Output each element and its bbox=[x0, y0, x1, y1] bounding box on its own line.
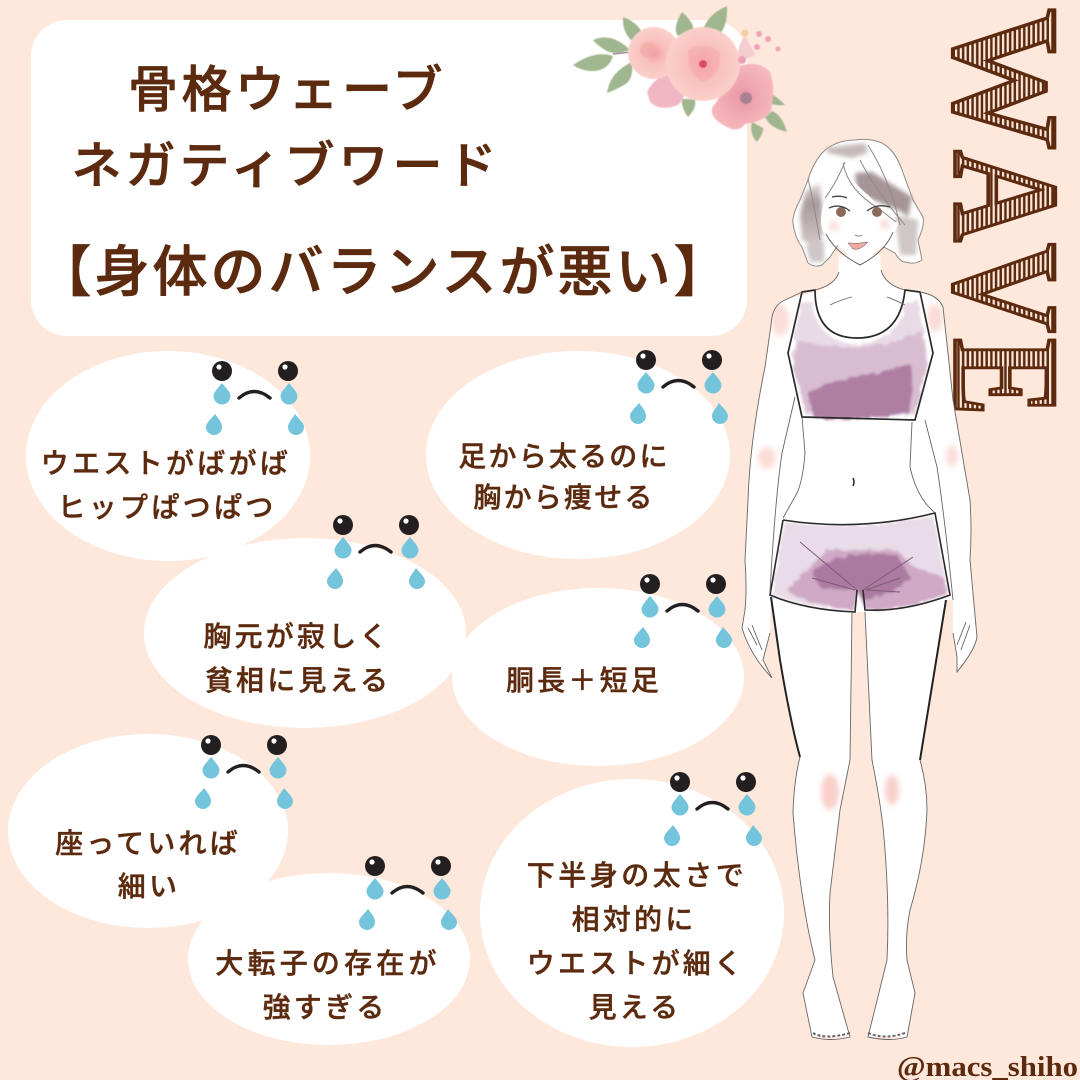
label line 2: 相対的に bbox=[572, 904, 696, 935]
body silhouette bbox=[742, 255, 977, 1037]
face bbox=[821, 163, 898, 265]
title line 2: ネガティブワード bbox=[72, 138, 500, 194]
shorts wash bbox=[772, 516, 948, 610]
illustration: rose bouquet bbox=[573, 6, 787, 142]
nose bbox=[855, 235, 862, 236]
mouth bbox=[848, 242, 868, 249]
body contour lines bbox=[742, 270, 977, 1040]
title line 1: 骨格ウェーブ bbox=[128, 62, 446, 118]
illustration: woman figure bbox=[742, 139, 977, 1039]
jaw bbox=[826, 232, 893, 265]
eyelids bbox=[829, 196, 890, 211]
crying face bbox=[195, 735, 293, 809]
oval: legs first bbox=[426, 350, 730, 559]
oval: lower body bbox=[480, 772, 784, 1047]
label: 大転子の存在が bbox=[215, 948, 441, 979]
hair shape bbox=[793, 139, 923, 266]
hair wash bbox=[800, 143, 918, 262]
label: 下半身の太さで bbox=[527, 860, 747, 891]
label line 2: 胸から痩せる bbox=[473, 482, 655, 513]
crying face bbox=[630, 350, 728, 424]
oval: chest bbox=[144, 515, 466, 728]
toes bbox=[813, 1033, 905, 1036]
crying face bbox=[634, 574, 732, 648]
leaves bbox=[573, 6, 787, 142]
label: 足から太るのに bbox=[458, 441, 670, 472]
label line 4: 見える bbox=[589, 992, 681, 1023]
navel bbox=[853, 478, 854, 486]
eyes bbox=[836, 207, 846, 217]
label line 2: 貧相に見える bbox=[205, 665, 391, 696]
subtitle: poor body balance: 【身体のバランスが悪い】 bbox=[37, 241, 731, 303]
oval: trochanter bbox=[188, 856, 470, 1045]
label: 座っていれば bbox=[55, 828, 241, 859]
title panel bbox=[31, 20, 747, 336]
oval: long torso bbox=[452, 574, 744, 766]
crying face bbox=[206, 361, 304, 435]
label: ウエストがばがば bbox=[41, 448, 291, 479]
head and hair bbox=[793, 139, 923, 266]
crop top wash bbox=[792, 300, 928, 419]
crying face bbox=[664, 772, 762, 846]
label line 3: ウエストが細く bbox=[527, 948, 745, 979]
hair strands bbox=[808, 145, 905, 240]
label line 2: ヒップぱつぱつ bbox=[57, 492, 277, 523]
shorts outline bbox=[770, 513, 950, 612]
crying face bbox=[327, 515, 425, 589]
stem bbox=[613, 52, 632, 54]
crying face bbox=[359, 856, 457, 930]
outer leg lines bbox=[771, 597, 946, 760]
shorts detail lines bbox=[800, 542, 913, 592]
skin blush washes bbox=[758, 304, 958, 810]
blossoms bbox=[628, 27, 780, 130]
oval: waist bbox=[26, 351, 310, 561]
label line 2: 強すぎる bbox=[263, 992, 387, 1023]
label: 胸元が寂しく bbox=[203, 621, 391, 652]
label: 胴長＋短足 bbox=[506, 665, 662, 696]
crop top outline bbox=[788, 290, 933, 420]
oval: sitting bbox=[8, 734, 293, 928]
cheeks bbox=[829, 219, 890, 231]
label line 2: 細い bbox=[118, 871, 180, 902]
